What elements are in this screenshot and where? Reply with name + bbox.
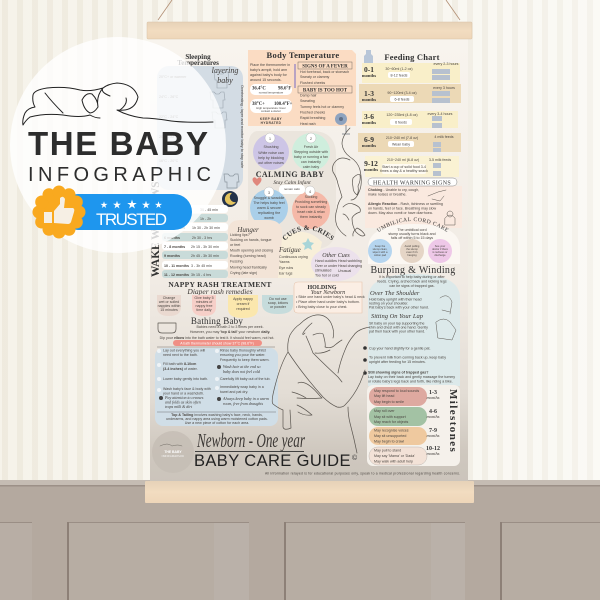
line art: parent holding baby [272,315,370,453]
panel: milestones: May roll over [374,409,395,413]
panel: nappy rash treatment: Diaper rash remedies [186,287,253,296]
wake windows table: 3h 15 - 4 hrs [191,273,211,277]
panel: nappy rash treatment: Change [163,296,175,300]
panel: nappy rash treatment: wet or soiled [159,300,179,304]
poster sheet [150,38,468,482]
panel: body temperature: 100.4°F+ [274,102,293,107]
panel: fatigue cues: Yawns [279,260,290,264]
panel: hunger cues: Mouth opening and closing [230,248,273,252]
panel: body temperature: Place the thermometer in [250,63,290,67]
wake windows table [162,205,228,278]
panel: burping and winding: To prevent milk from coming back up, keep baby [369,356,446,360]
panel: burping and winding [363,265,460,386]
panel: burping and winding: It is important to help baby during or after [379,275,446,279]
panel: burping and winding: Burping & Winding [370,265,456,276]
panel: bathing baby: towel and pat dry. [220,390,248,394]
panel: holding your newborn [294,282,365,313]
panel: body temperature: BABY IS TOO HOT [303,88,348,94]
panel: calming baby: Sucking [305,195,317,199]
panel: umbilical cord care: Keep the [375,244,386,248]
panel: milestones: months [426,433,440,438]
panel: calming baby: remain calm [284,187,301,191]
panel: burping and winding: Sitting On Your Lap [371,313,424,320]
panel: hunger cues: Rooting (turning head) [230,254,266,258]
panel: bathing baby: Carefully lift baby out of the tub. [220,377,271,381]
panel: body temperature: around 15 seconds. [250,78,282,82]
panel: sleeping temperatures and layering: 22°C - 24°C [159,115,179,119]
panel: bathing baby: and folds as skin often [165,400,201,404]
panel: calming baby: help by blocking [258,156,284,160]
heading: wake windows: WAKE WINDOWS [150,181,162,277]
panel: body temperature: HYDRATED [261,121,282,125]
panel: health warning signs: on hands, feet or face. Breathing may slow [368,206,437,210]
panel: sleeping temperatures and layering: baby [217,76,233,85]
panel: feeding chart: months [362,73,376,78]
panel: milestones: months [426,395,440,400]
panel: sleeping temperatures and layering: 20°C - 22°C [159,135,179,139]
panel: milestones: 1-3 [429,390,437,396]
panel: nappy rash treatment: soap, lotions [268,301,288,305]
panel: nappy rash treatment: NAPPY RASH TREATMENT [168,280,272,289]
panel: calming baby: womb [264,216,274,220]
panel: bathing baby: Always keep baby in a warm [222,396,269,401]
panel: feeding chart: Feeding Chart [384,52,440,62]
panel: feeding chart: months [362,143,376,148]
panel: other cues [311,247,362,281]
panel: feeding chart: 3-5 milk feeds [429,158,451,162]
panel: feeding chart: 6-9 [364,135,374,144]
panel: body temperature: KEEP BABY [260,117,283,121]
footer disclaimer: All information relayed is for educational purposes only, speak to a medical professional regarding health concerns. [265,472,460,476]
panel: hunger cues [228,220,282,278]
panel: body temperature: contact a doctor [261,109,281,113]
panel: bathing baby: A bath thermometer should show 37°C (98.6°F) [180,341,254,345]
panel: calming baby: White noise can [258,151,284,155]
panel: body temperature: Body Temperature [267,50,339,60]
panel: calming baby: The helps baby feel [253,201,285,205]
panel: umbilical cord care: stump usually turns black and [388,232,436,236]
heading: baby care guide: Newborn - One year [196,430,305,452]
panel: body temperature: Hot forehead, back or stomach [300,70,349,74]
panel: hunger cues: Hunger [236,226,259,234]
panel: bathing baby: your hand or a washcloth. [163,392,204,396]
panel: burping and winding: or rotate baby's legs back and forth, like riding a bike. [368,380,453,384]
panel: calming baby: heart rate & relax [297,210,325,214]
panel: calming baby: Providing something [295,200,327,204]
panel: milestones: May lift head [374,394,394,398]
panel: umbilical cord care: UMBILICAL CORD CARE [376,217,448,232]
panel: umbilical cord care: Avoid pulling [405,244,420,248]
panel: other cues: Too hot or cold [315,274,339,278]
wake windows table: 2h 15 - 3h 30 min [191,245,219,249]
panel: nappy rash treatment: nappies within [158,304,180,308]
panel: calming baby: 3 [268,191,270,195]
panel: body temperature: Flushed cheeks [300,110,325,114]
panel: calming baby: 2 [310,137,312,141]
panel: milestones: 7-9 [429,428,437,434]
wake windows table: 2h 30 - 3 hrs [192,236,212,240]
panel: body temperature: Heat rash [300,122,316,126]
panel: feeding chart: months [364,167,378,172]
panel: milestones: May sit unsupported [374,434,406,438]
panel: bathing baby: Wash baby's face & body with [163,387,211,391]
panel: bathing baby: Babies need a bath 2 to 3 times per week. [196,325,264,329]
panel: umbilical cord care [368,217,460,264]
wake windows table: 2h 45 - 3h 30 min [191,254,219,258]
panel: milestones: Milestones [447,389,459,453]
panel: sleeping temperatures and layering: 20°C+ or warmer [159,75,187,79]
panel: feeding chart: months [362,120,376,125]
panel: umbilical cord care: cotton pad [374,253,387,257]
logo subheading: infographic: INFOGRAPHIC [28,164,211,186]
panel: fatigue cues: CUES & CRIES [282,225,334,240]
panel: milestones: May recognise voices [374,428,409,432]
panel: body temperature: against baby's body for [250,73,288,77]
panel: burping and winding: upright after feeding for 15 minutes. [369,360,426,364]
panel: nappy rash treatment [157,280,293,318]
panel: milestones: 10-12 [426,446,440,452]
panel: nappy rash treatment: cream if [237,302,249,306]
panel: bathing baby: Fill bath with 8-10cm [163,362,196,366]
wake windows table: 7 - 8 months [164,245,185,249]
panel: calming baby: Shushing [264,145,278,149]
panel: sleeping temperatures and layering: Temperatures [177,59,219,67]
panel: calming baby: Fresh Air [304,145,319,149]
panel: calming baby: calm baby [303,165,319,169]
panel: health warning signs: Choking - Unable to cry, cough, [368,188,419,192]
panel: feeding chart: 210~240 ml (6-8 oz) [387,158,419,162]
panel: holding your newborn: • Slide one hand under baby's head & neck [296,295,365,299]
panel: body temperature: High temperature: fever [256,106,286,110]
panel: feeding chart: 9-12 [364,159,378,168]
panel: hunger cues: or feet [230,243,240,247]
panel: calming baby: them instantly [300,215,322,219]
panel: hunger cues: Licking lips? [230,233,250,237]
panel: other cues: Unusual [338,269,351,273]
panel: feeding chart: Wean baby [392,142,410,146]
panel: fatigue cues: Fatigue [278,246,301,254]
panel: umbilical cord care: The umbilical cord [397,228,427,232]
panel: burping and winding: Pat baby's back with your other hand. [369,306,429,310]
panel: calming baby: replicating the [258,211,280,215]
panel: calming baby: out other noises [258,161,284,165]
trusted badge [32,186,192,238]
panel: other cues: Head wobbling [338,259,362,263]
panel: calming baby: baby or running a fan [294,155,328,159]
logo heading: the baby: THE BABY [28,125,208,162]
panel: health warning signs: Allergic Reaction - Rash, itchiness or swelling [368,202,443,206]
poster logo: INFOGRAPHIC [162,454,184,458]
wake windows table: 0 - 1 month [164,208,183,212]
wake windows table: 6 months [164,236,180,240]
panel: other cues: Over or under [315,264,338,268]
panel: burping and winding: Hold baby upright with their head [369,298,422,302]
panel: burping and winding: Over The Shoulder [370,290,420,297]
panel: umbilical cord care: is redness or [433,250,448,254]
panel: milestones: 4-6 [429,409,437,415]
panel: burping and winding: Lay baby on their back and gently massage the tummy [368,375,455,379]
panel: calming baby: Stepping outside with [294,150,328,154]
panel: nappy rash treatment: or powder [270,305,287,309]
panel: bathing baby: underarms, and nappy area using warm moistened cotton pads. [166,417,268,421]
panel: holding your newborn: • Bring baby close to your chest. [296,305,347,309]
panel: body temperature: 98.6°F [278,86,291,92]
panel: feeding chart: 8-12 feeds [391,74,408,78]
panel: calming baby: to suck can steady [296,205,326,209]
panel: calming baby [248,131,336,249]
panel: bathing baby: Wash hair at the end so [223,364,261,369]
panel: bathing baby: need next to the bath. [163,353,198,357]
panel: burping and winding: Sit baby on your lap supporting the [369,322,425,326]
panel: umbilical cord care: even if it's [406,250,418,254]
poster logo: THE BABY [164,450,182,454]
panel: sleeping temperatures and layering [157,53,244,190]
panel: health warning signs [365,178,462,228]
panel: umbilical cord care: stump clean, [373,247,388,251]
panel: body temperature: Sweaty or clammy [300,75,330,79]
panel: bathing baby: Pay attention to creases [164,395,204,400]
wake windows table: 9 months [164,254,180,258]
panel: milestones: months [426,451,440,456]
panel: holding your newborn: • Place other hand under baby's bottom. [296,300,360,304]
panel: nappy rash treatment: minutes of [196,300,212,304]
panel: nappy rash treatment: 15 minutes [160,308,178,312]
panel: bathing baby: Lower baby gently into bath. [163,377,208,381]
panel: bathing baby: Top & Tailing involves washing baby's face, neck, hands, [171,413,263,417]
panel: health warning signs: down. May also vomit or have diarrhoea. [368,211,433,215]
panel: body temperature: baby's armpit, hold arm [250,68,287,72]
wake windows table: 11 - 12 months [164,273,189,277]
top wooden rail [147,22,472,39]
panel: nappy rash treatment: nappy free [196,304,212,308]
panel: milestones: May say 'Mama' or 'Dada' [374,454,415,458]
panel: feeding chart: 1-3 [364,89,374,98]
panel: umbilical cord care: See your [435,244,445,248]
panel: bathing baby: Bathing Baby [191,316,243,326]
panel: body temperature: Tummy feels hot or clammy [300,105,344,109]
panel: burping and winding: Cup your hand slightly for a gentle pat. [369,346,431,350]
panel: sleeping temperatures and layering: 16°C - 20°C [159,159,179,163]
panel: nappy rash treatment: Apply nappy [233,297,253,301]
panel: sleeping temperatures and layering: Overheating - layer and monitor baby to stay safe [240,85,244,168]
panel: bathing baby: Use a new piece of cotton for each area. [185,421,249,425]
panel: bathing baby: (3-4 inches) of water. [163,367,198,371]
panel: nappy rash treatment: Do not use [269,297,287,301]
heading: baby care guide [194,430,358,470]
panel: feeding chart: months [362,97,376,102]
panel: other cues: stimulated [315,268,331,272]
panel: other cues: Head changing [338,264,362,268]
panel: calming baby: can instantly [301,160,321,164]
panel: burping and winding: pat their back with your other hand. [369,330,425,334]
bottom wooden rail [145,481,474,503]
icon: sleeping baby line drawing [23,83,213,125]
panel: feeding chart: 0-1 [364,65,374,74]
heading: baby care guide: BABY CARE GUIDE [194,452,351,470]
panel: calming baby: Snuggle & swaddle [254,196,284,200]
panel: nappy rash treatment: Give baby 5 [194,296,214,300]
panel: milestones: May sit with support [374,415,406,419]
panel: bathing baby: Lay out everything you will [163,348,205,352]
panel: calming baby: Stay Calm Infant [273,179,311,186]
panel: feeding chart: every 3-4 hours [428,112,453,116]
panel: body temperature: Flushed cheeks [300,81,325,85]
panel: nappy rash treatment: required [236,307,250,311]
panel: hunger cues: Sucking on hands, tongue [230,238,272,242]
panel: milestones: May begin to crawl [374,440,404,444]
hanging strings [158,0,460,20]
wake windows table: 1h 30 - 2h 30 min [192,226,220,230]
panel: hunger cues: Moving head frantically [230,266,267,270]
panel: milestones [367,385,460,466]
panel: health warning signs: make noises or breathe. [368,192,407,196]
panel: body temperature: SIGNS OF A FEVER [302,64,348,70]
panel: feeding chart: 120~235ml (4-8 oz) [386,113,418,117]
panel: feeding chart: every 3 hours [433,86,455,90]
panel: body temperature [248,50,356,126]
panel: umbilical cord care: hanging [407,253,417,257]
panel: bathing baby: traps milk & dirt [165,404,193,409]
panel: holding your newborn: Your Newborn [311,290,345,296]
panel: milestones: May respond to loud sounds [374,389,419,393]
panel: feeding chart: every 2-3 hours [434,62,459,66]
panel: calming baby: warm & secure [257,206,281,210]
panel: feeding chart: 6-8 feeds [395,98,410,102]
heading: baby care guide: © [352,454,358,462]
panel: burping and winding: can be signs of trapped gas. [389,284,435,288]
wake windows table: 4 - 5 months [164,226,185,230]
panel: bathing baby: Dip your elbow into the bath water to test it. It should feel warm, not hot. [160,336,274,340]
panel: umbilical cord care: falls off within 5 to 15 days [391,236,433,240]
panel: sleeping temperatures and layering: layering [212,66,238,75]
panel: feeding chart: 4 milk feeds [434,135,454,139]
panel: feeding chart: times a day & a healthy snack [380,169,428,173]
wake windows table: 2 - 3 months [164,217,185,221]
poster logo [152,431,194,473]
panel: fatigue cues: Eye rubs [279,266,293,270]
panel: burping and winding: chin and chest with one hand. Gently [369,326,428,330]
panel: bathing baby [155,316,278,426]
overlay: white logo circle [10,37,226,253]
wake windows table: 1h - 2h [200,217,211,221]
wake windows table: 3 - 3h 45 min [191,264,212,268]
panel: calming baby: CALMING BABY [256,170,324,179]
panel: feeding chart [358,50,461,177]
line art: fetus [332,128,365,236]
panel: milestones: May reach for objects [374,420,409,424]
panel: umbilical cord care: discharge [434,253,446,257]
panel: bathing baby: Frequently to keep them warm. [220,358,270,362]
panel: burping and winding: resting on your shoulder. [369,302,408,306]
panel: nappy rash treatment: time daily [196,308,212,312]
icon: moon [222,191,238,207]
panel: burping and winding: feeds. Crying, arched back and kicking legs [377,280,447,284]
panel: fatigue cues [278,225,334,278]
panel: bathing baby: Rinse baby thoroughly whilst [220,348,266,352]
panel: hunger cues: Crying (late sign) [230,271,257,275]
panel: feeding chart: Start a cup of solid food 3-4 [382,165,426,169]
panel: calming baby: 4 [309,190,311,194]
panel: body temperature: normal temperature [259,90,284,94]
panel: body temperature: 36.4°C [252,86,266,92]
panel: health warning signs: HEALTH WARNING SIGNS [373,180,451,186]
wainscot panelling [0,480,600,600]
panel: bathing baby: Immediately wrap baby in a [220,385,264,389]
panel: umbilical cord care: doctor if there [432,247,448,251]
panel: hunger cues: Fussing [230,260,243,264]
panel: body temperature: Sweating [300,99,315,103]
panel: feeding chart: 3-6 [364,112,374,121]
panel: feeding chart: 6 feeds [395,120,407,124]
panel: fatigue cues: Ear tugs [279,272,293,276]
panel: fatigue cues: Continuous crying [279,255,308,259]
panel: milestones: months [426,414,440,419]
panel: sleeping temperatures and layering: Sleeping [185,53,211,61]
panel: bathing baby: However, you may 'top & tail' your newborn daily. [190,330,270,334]
panel: bathing baby: ensuring you pour the water. [220,353,265,357]
panel: body temperature: Rapid breathing [300,116,325,120]
panel: milestones: May walk with adult help [374,460,413,464]
panel: bathing baby: room, free from draughts [223,401,263,407]
panel: other cues: Hand cuddles [315,259,337,263]
panel: milestones: May pull to stand [374,448,401,452]
panel: other cues: Other Cues [322,253,350,259]
panel: body temperature: 38°C+ [252,102,265,107]
panel: umbilical cord care: the stump [406,247,418,251]
panel: feeding chart: 210~240 ml (7-8 oz) [386,136,418,140]
panel: feeding chart: 30~60ml (1-2 oz) [385,67,413,71]
panel: body temperature: Damp hair [300,94,317,98]
panel: holding your newborn: HOLDING [307,285,337,291]
panel: feeding chart: 90~120ml (3-4 oz) [387,91,417,95]
wake windows table: 10 - 11 months [164,264,189,268]
panel: sleeping temperatures and layering: 24°C - 26°C [159,95,179,99]
panel: calming baby: 1 [269,137,271,141]
icon: fan [335,113,350,134]
panel: milestones: May begin to smile [374,400,404,404]
wake windows table: 30 - 45 min [200,208,218,212]
trusted badge: TRUSTED [96,210,167,229]
panel: umbilical cord care: wipe it with a [373,250,388,254]
panel: bathing baby: baby does not feel cold [223,369,261,374]
panel: burping and winding: Still showing signs of trapped gas? [368,370,428,374]
